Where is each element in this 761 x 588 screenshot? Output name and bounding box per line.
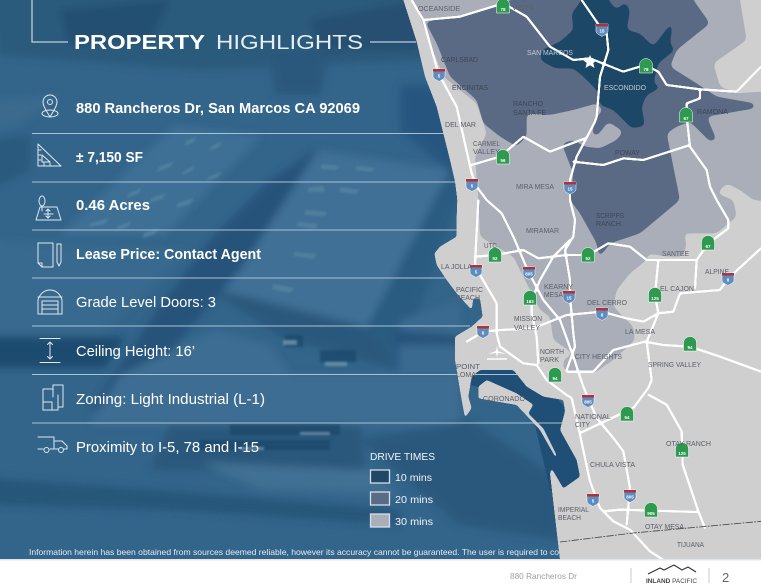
state route shields: 125 xyxy=(678,451,686,456)
interstate shields: 8 xyxy=(482,330,485,336)
interstate shields: 8 xyxy=(601,312,604,318)
map place labels: ENCINITAS xyxy=(452,83,488,92)
map place labels: PACIFIC xyxy=(456,285,483,294)
footer xyxy=(0,559,761,588)
state route shields: 52 xyxy=(585,256,591,261)
icon: airport xyxy=(487,346,507,360)
map place labels: SANTEE xyxy=(662,249,689,258)
map place labels: MIRAMAR xyxy=(526,226,559,235)
interstate shields xyxy=(433,24,734,506)
interstate shields: 15 xyxy=(567,186,573,192)
map place labels: TIJUANA xyxy=(677,540,704,549)
map place labels: VISTA xyxy=(512,3,534,12)
interstate shields: 805 xyxy=(525,272,533,276)
map place labels: MESA xyxy=(544,290,563,299)
map place labels: NATIONAL xyxy=(575,412,611,421)
highlight: ceiling height: Ceiling Height: 16’ xyxy=(76,343,195,360)
map place labels: ALPINE xyxy=(705,267,729,276)
map place labels: SPRING VALLEY xyxy=(648,360,701,369)
map place labels: CITY HEIGHTS xyxy=(575,352,622,361)
legend: drive times: 30 mins xyxy=(395,516,433,528)
highway network xyxy=(412,0,761,560)
highlight: proximity: Proximity to I-5, 78 and I-15 xyxy=(76,439,259,456)
state route shields: 163 xyxy=(526,299,534,304)
map place labels: CARLSBAD xyxy=(441,55,478,64)
land mass xyxy=(398,0,761,580)
state route shields: 78 xyxy=(643,67,649,72)
map place labels: LA MESA xyxy=(625,327,655,336)
interstate shields: 15 xyxy=(566,296,572,300)
aerial photo background xyxy=(0,0,600,560)
map place labels: MISSION xyxy=(514,314,542,323)
map place labels: VALLEY xyxy=(514,323,540,332)
state route shields: 52 xyxy=(492,256,498,261)
highlight: doors: Grade Level Doors: 3 xyxy=(76,294,216,311)
map place labels: VALLEY xyxy=(473,147,500,156)
state route shields: 94 xyxy=(552,376,558,381)
legend: drive times: DRIVE TIMES xyxy=(370,451,435,463)
icon: map pin xyxy=(42,95,58,117)
map place labels: DEL MAR xyxy=(445,120,476,129)
state route shields: 125 xyxy=(651,296,659,301)
map place labels: CITY xyxy=(575,420,590,429)
disclaimer text: Information herein has been obtained from sources deemed reliable, however its accuracy cannot be guaranteed. The user is required to conduct xyxy=(29,548,581,557)
state route shields: 905 xyxy=(647,511,655,516)
drive time zone: 20 mins xyxy=(425,0,755,258)
map place labels: LOMA xyxy=(456,370,476,379)
state route shields: 56 xyxy=(500,158,506,163)
icon: property star xyxy=(583,55,597,68)
map place labels: EL CAJON xyxy=(660,284,694,293)
interstate shields: 5 xyxy=(475,270,478,274)
drive time zone: 10 mins xyxy=(540,0,675,128)
map place labels: OCEANSIDE xyxy=(418,4,460,13)
map place labels: RAMONA xyxy=(697,107,728,116)
map place labels: BEACH xyxy=(456,293,480,302)
highlight: zoning: Zoning: Light Industrial (L-1) xyxy=(76,391,265,408)
map place labels: IMPERIAL xyxy=(558,505,589,514)
map place labels: RANCHO xyxy=(513,99,543,108)
map place labels: BEACH xyxy=(558,513,581,522)
interstate shields: 5 xyxy=(592,498,595,504)
map place labels xyxy=(418,3,729,549)
highlight: lease price: Lease Price: Contact Agent xyxy=(76,246,261,263)
title: HIGHLIGHTS xyxy=(216,31,363,54)
footer: INLAND PACIFIC xyxy=(646,579,698,585)
interstate shields: 8 xyxy=(727,278,730,282)
icon: document and pen xyxy=(38,243,61,267)
map place labels: CORONADO xyxy=(483,394,525,403)
map place labels: NORTH xyxy=(540,347,564,356)
map place labels: KEARNY xyxy=(544,282,573,291)
highlight: acres: 0.46 Acres xyxy=(76,197,150,214)
title xyxy=(74,31,363,54)
icon: trucks xyxy=(38,437,67,452)
state route shields: 78 xyxy=(500,7,506,12)
map place labels: ESCONDIDO xyxy=(604,83,646,92)
map place labels: SCRIPPS xyxy=(596,211,624,220)
map place labels: LA JOLLA xyxy=(441,262,472,271)
bay water xyxy=(470,360,585,490)
highlight: address: 880 Rancheros Dr, San Marcos CA 92069 xyxy=(76,100,360,117)
icon: height arrow xyxy=(40,338,60,362)
map place labels: PARK xyxy=(540,355,559,364)
map place labels: CARMEL xyxy=(473,139,500,148)
map xyxy=(398,0,761,580)
interstate shields: 805 xyxy=(584,400,592,404)
map place labels: SAN MARCOS xyxy=(527,48,573,57)
interstate shields: 5 xyxy=(438,74,441,78)
row divider lines xyxy=(32,134,565,423)
drive time zone: 30 mins xyxy=(408,0,761,373)
state route shields xyxy=(488,0,714,517)
interstate shields: 5 xyxy=(471,184,474,188)
state route shields: 67 xyxy=(705,244,711,249)
icon: garage xyxy=(38,290,62,314)
legend: drive times: 10 mins xyxy=(395,472,432,484)
footer: 880 Rancheros Dr xyxy=(510,571,577,581)
map place labels: CHULA VISTA xyxy=(590,460,635,469)
title frame line xyxy=(32,0,416,42)
icon: lot with tree xyxy=(36,196,61,220)
footer: 2 xyxy=(722,570,729,585)
map place labels: MIRA MESA xyxy=(516,182,554,191)
interstate shields: 805 xyxy=(626,494,634,500)
map place labels: POINT xyxy=(456,362,481,371)
state route shields: 94 xyxy=(687,345,693,350)
map place labels: OTAY MESA xyxy=(645,522,684,531)
title: PROPERTY xyxy=(74,31,205,54)
map place labels: DEL CERRO xyxy=(587,298,627,307)
map place labels: UTC xyxy=(484,241,497,250)
map place labels: SANTA FE xyxy=(513,108,546,117)
map place labels: POWAY xyxy=(615,148,640,157)
map place labels: RANCH xyxy=(596,219,621,228)
map place labels: OTAY RANCH xyxy=(666,439,711,448)
state route shields: 67 xyxy=(683,116,689,121)
legend: drive times: 20 mins xyxy=(395,494,433,506)
interstate shields: 15 xyxy=(599,28,605,34)
border line xyxy=(560,521,761,542)
icon: set square xyxy=(38,144,61,166)
highlight: size: ± 7,150 SF xyxy=(76,149,143,166)
legend: drive times xyxy=(370,451,435,528)
state route shields: 54 xyxy=(624,415,630,420)
icon: floor plan xyxy=(43,385,63,410)
